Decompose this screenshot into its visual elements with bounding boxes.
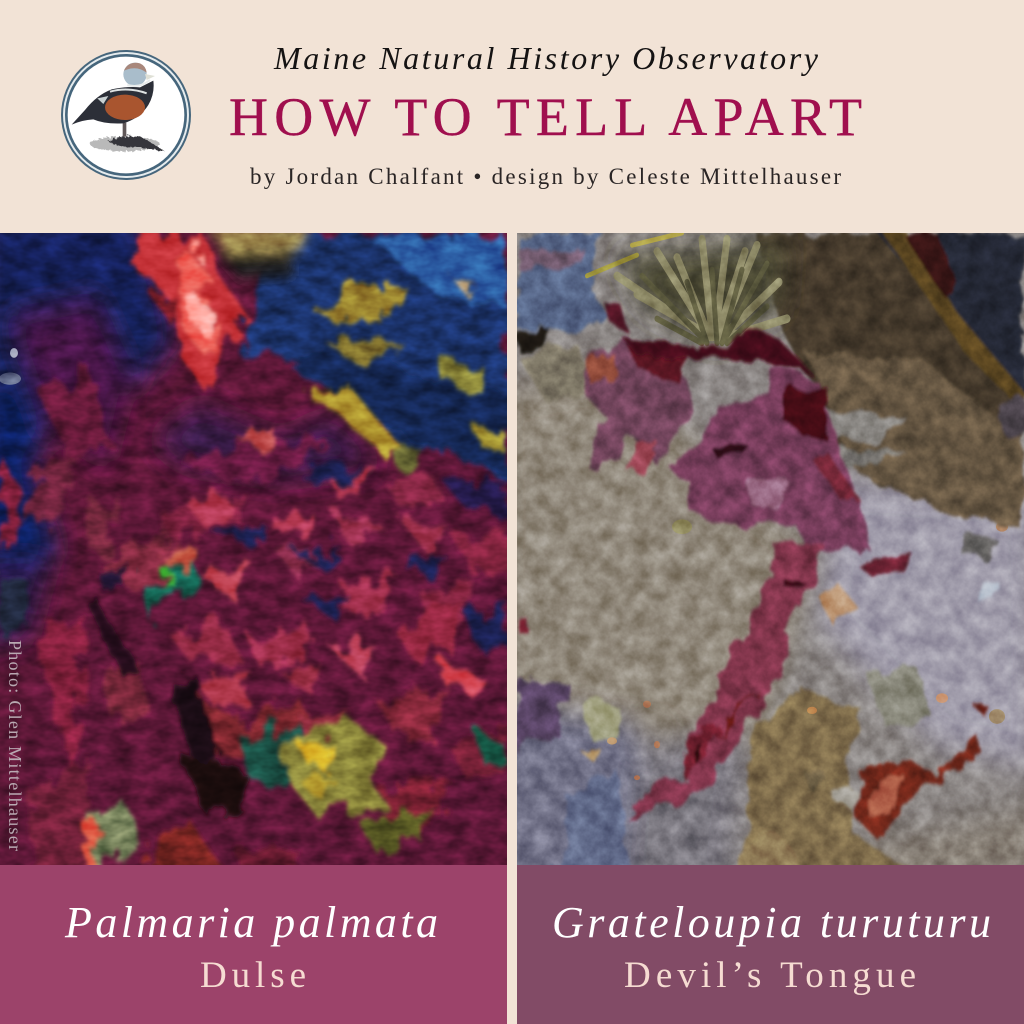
rock at top edge [205, 227, 310, 280]
tongue-shaped blade [627, 541, 822, 821]
dark red band under rockweed [602, 300, 812, 374]
navy water, upper left [0, 209, 520, 1016]
blue rock, top left [517, 233, 612, 404]
sandy grey pool floor [497, 368, 1024, 1024]
bright red sunlit dulse [130, 233, 250, 392]
blue stones, bottom left [517, 680, 632, 1007]
common name: Devil’s Tongue [624, 955, 916, 996]
blue water with rockweed, upper right [240, 233, 507, 484]
photo: devil's tongue, Grateloupia turuturu [517, 233, 1024, 865]
header text block [229, 40, 862, 189]
red-purple blade: upper left lobe [582, 337, 692, 472]
photo: dulse, Palmaria palmata [0, 233, 507, 865]
credits: by Jordan Chalfant • design by Celeste Mittelhauser [250, 164, 841, 189]
panel: devil's tongue species label [517, 865, 1024, 1024]
main title: HOW TO TELL APART [229, 87, 862, 147]
organisation name: Maine Natural History Observatory [273, 40, 819, 76]
sand and gravel, lower centre [582, 588, 1024, 1007]
pebbles [607, 331, 1008, 780]
dark shore and brown gravel, top right [757, 227, 1024, 533]
duck illustration [72, 63, 165, 152]
scientific name: Grateloupia turuturu [552, 898, 991, 947]
rockweed clump at top [587, 233, 787, 343]
photo credit: Photo: Glen Mittelhauser [5, 640, 25, 851]
dark maroon blades, left side [0, 368, 235, 1016]
yellow rockweed, bottom [240, 716, 507, 851]
photo texture [0, 233, 507, 865]
dark blue ripples [0, 459, 507, 680]
badge ring [61, 50, 191, 180]
mottled dulse ridges, centre [100, 429, 507, 980]
panel: dulse species label [0, 865, 507, 1024]
photo bubbles [0, 348, 21, 385]
photo texture [517, 233, 1024, 865]
lower right red fragment [834, 554, 987, 839]
logo: harlequin duck badge [61, 50, 191, 180]
green algae patch [142, 545, 200, 622]
scientific name: Palmaria palmata [64, 898, 438, 947]
common name: Dulse [200, 955, 306, 996]
main purple blade [672, 362, 872, 551]
brown-red frond, lower centre [82, 674, 310, 1007]
pale stones [517, 533, 999, 731]
rockweed fronds [305, 276, 507, 478]
